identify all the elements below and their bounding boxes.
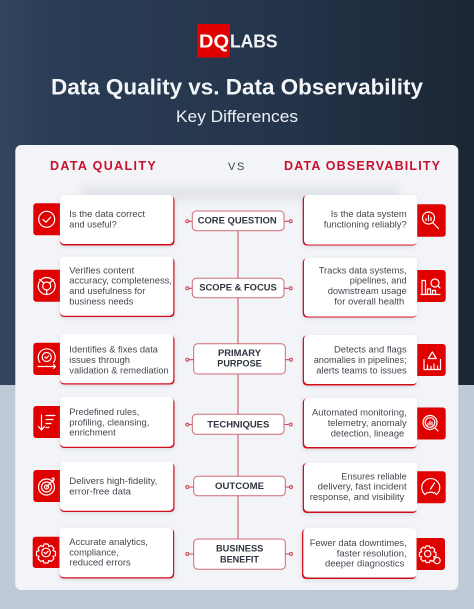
left card: Predefined rules,	[69, 407, 139, 418]
right card	[303, 195, 417, 246]
background: dark upper area	[0, 0, 474, 385]
right card	[303, 398, 417, 448]
right icon: alert bars	[415, 344, 446, 376]
left icon: segmented ring	[33, 270, 63, 302]
left card	[60, 462, 174, 512]
center label: TECHNIQUES	[207, 419, 269, 430]
row 6: business benefit	[33, 528, 445, 579]
right card: deeper diagnostics	[325, 559, 404, 570]
right card: Tracks data systems,	[319, 265, 407, 276]
left icon: check circle	[33, 203, 63, 235]
center label: PURPOSE	[217, 359, 262, 370]
right icon: gauge	[415, 471, 446, 503]
left card: issues through	[69, 355, 130, 366]
right card: alerts teams to issues	[316, 365, 407, 376]
row 3: primary purpose	[33, 334, 446, 386]
center label: CORE QUESTION	[198, 216, 277, 227]
row 1: core question	[33, 195, 446, 246]
right card: anomalies in pipelines;	[314, 355, 407, 366]
right card: Detects and flags	[334, 345, 407, 356]
center label	[186, 539, 292, 569]
right card: Is the data system	[331, 209, 407, 220]
left card: Accurate analytics,	[69, 537, 148, 548]
left card: Identifies & fixes data	[69, 345, 159, 356]
left card: error-free data	[69, 486, 132, 497]
right card: downstream usage	[328, 286, 407, 297]
left card: validation & remediation	[69, 365, 169, 376]
background: light lower area	[0, 385, 474, 609]
left card	[60, 257, 174, 317]
right card: faster resolution,	[337, 548, 407, 559]
right card	[302, 528, 416, 579]
left icon: sort list	[33, 406, 63, 438]
center label: SCOPE & FOCUS	[199, 283, 277, 294]
panel: comparison	[15, 145, 458, 590]
right card	[303, 335, 417, 386]
right card	[303, 463, 417, 513]
right card: Fewer data downtimes,	[310, 538, 407, 549]
left card: accuracy, completeness,	[69, 276, 172, 287]
right card: for overall health	[334, 296, 404, 307]
right card: response, and visibility	[310, 492, 404, 503]
center label: BENEFIT	[220, 555, 259, 566]
right card: pipelines, and	[350, 276, 407, 287]
right icon: search analytics	[415, 408, 446, 440]
center label: OUTCOME	[215, 481, 264, 492]
subtitle: Key Differences	[176, 108, 298, 126]
left card: enrichment	[69, 428, 116, 439]
center label: BUSINESS	[216, 544, 263, 555]
title: Data Quality vs. Data Observability	[51, 74, 423, 99]
logo: DQLABS	[197, 24, 278, 58]
center label	[186, 414, 292, 434]
left card: reduced errors	[69, 558, 131, 569]
heading: vs: VS	[228, 161, 244, 173]
logo: DQLABS: LABS	[230, 32, 278, 52]
right card: detection, lineage	[331, 428, 404, 439]
left card: profiling, cleansing,	[69, 417, 149, 428]
heading: data quality: DATA QUALITY	[50, 159, 156, 173]
left card: and useful?	[69, 220, 117, 230]
center label	[186, 476, 292, 496]
left card: and usefulness for	[69, 286, 146, 297]
left card: Is the data correct	[69, 209, 145, 220]
row 2: scope and focus	[33, 257, 446, 318]
right card: delivery, fast incident	[318, 482, 407, 493]
center label: PRIMARY	[218, 348, 262, 359]
left icon: gear check	[33, 537, 63, 568]
row 4: techniques	[33, 397, 446, 448]
right card: functioning reliably?	[324, 219, 407, 230]
left icon: target cycle	[33, 343, 63, 375]
left card: compliance,	[69, 547, 119, 558]
right card	[303, 258, 417, 318]
right icon: magnifier chart	[415, 204, 446, 237]
right card: Automated monitoring,	[312, 408, 407, 419]
left card	[60, 334, 174, 384]
left icon: target	[33, 470, 63, 502]
left card	[60, 195, 174, 246]
left card	[60, 528, 174, 578]
right icon: bars and magnifier	[415, 270, 446, 302]
center label	[186, 211, 292, 231]
right card: telemetry, anomaly	[328, 418, 407, 429]
left card	[60, 397, 174, 448]
center timeline line	[237, 231, 239, 539]
heading: data observability: DATA OBSERVABILITY	[284, 159, 441, 173]
center label	[186, 344, 292, 374]
center label	[186, 278, 292, 298]
logo: DQLABS: DQ	[199, 32, 229, 52]
right card: Ensures reliable	[341, 471, 407, 482]
row 5: outcome	[33, 462, 446, 513]
left card: Verifies content	[69, 265, 135, 276]
left card: business needs	[69, 296, 133, 307]
left card: Delivers high-fidelity,	[69, 476, 157, 487]
right icon: gears	[414, 538, 445, 570]
